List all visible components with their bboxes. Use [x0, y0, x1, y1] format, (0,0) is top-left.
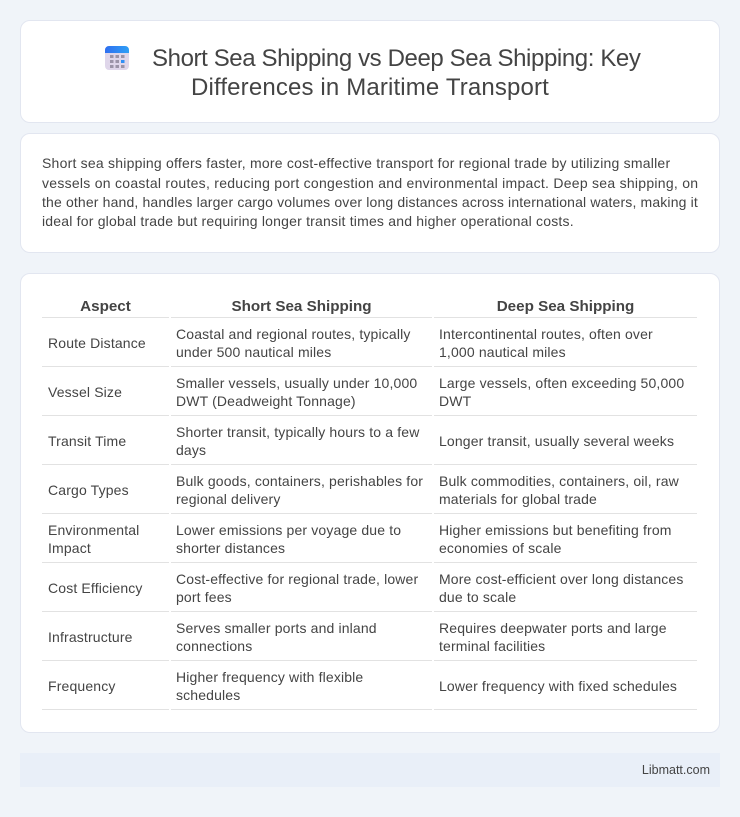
row: Infrastructure: Requires deepwater ports and large	[439, 620, 667, 636]
panel: header	[20, 20, 720, 123]
row: Environmental Impact	[48, 522, 672, 556]
row: Transit Time: Shorter transit, typically hours to a few	[176, 424, 419, 440]
title line 1: Short Sea Shipping vs Deep Sea Shipping: Key	[152, 45, 641, 72]
row: Transit Time: Longer transit, usually several weeks	[439, 433, 674, 449]
row: Infrastructure: Infrastructure	[48, 629, 133, 645]
row: Route Distance: 1,000 nautical miles	[439, 344, 566, 360]
row: Route Distance: under 500 nautical miles	[176, 344, 331, 360]
footer credit: Libmatt.com	[642, 763, 710, 777]
row: Transit Time: Transit Time	[48, 433, 126, 449]
row: Route Distance: Intercontinental routes, often over	[439, 326, 653, 342]
row: Vessel Size: Smaller vessels, usually under 10,000	[176, 375, 417, 391]
header: Deep Sea Shipping: Deep Sea Shipping	[497, 298, 634, 315]
header: Short Sea Shipping: Short Sea Shipping	[231, 298, 372, 315]
row: Infrastructure	[48, 620, 667, 654]
row: Transit Time	[48, 424, 674, 458]
header: Aspect: Aspect	[80, 298, 131, 315]
row: Frequency: Lower frequency with fixed schedules	[439, 678, 677, 694]
row: Infrastructure: connections	[176, 638, 252, 654]
row: Cargo Types: regional delivery	[176, 491, 280, 507]
row: Route Distance: Route Distance	[48, 335, 146, 351]
intro line 2: vessels on coastal routes, reducing port congestion and environmental impact. Deep sea shipping, on	[42, 175, 698, 191]
row: Transit Time: days	[176, 442, 206, 458]
row: Cargo Types: Bulk goods, containers, perishables for	[176, 473, 423, 489]
row: Route Distance	[48, 326, 653, 360]
row: Cost Efficiency: port fees	[176, 589, 232, 605]
panel: comparison table	[20, 273, 720, 733]
row: Cost Efficiency: Cost-effective for regional trade, lower	[176, 571, 418, 587]
row: Environmental Impact: Environmental	[48, 522, 139, 538]
row: Route Distance: Coastal and regional routes, typically	[176, 326, 410, 342]
row: Cargo Types: Cargo Types	[48, 482, 129, 498]
row: Vessel Size: DWT	[439, 393, 471, 409]
row: Infrastructure: terminal facilities	[439, 638, 545, 654]
row: Infrastructure: Serves smaller ports and inland	[176, 620, 377, 636]
title line 2: Differences in Maritime Transport	[191, 74, 549, 101]
row: Frequency: Higher frequency with flexible	[176, 669, 363, 685]
icon: calendar	[105, 46, 129, 70]
row: Frequency: schedules	[176, 687, 240, 703]
row: Environmental Impact: economies of scale	[439, 540, 562, 556]
row: Vessel Size	[48, 375, 684, 409]
intro line 4: ideal for global trade but requiring longer transit times and higher operational costs.	[42, 213, 574, 229]
row: Frequency	[48, 669, 677, 703]
panel: introduction	[20, 133, 720, 253]
footer	[20, 753, 720, 787]
row: Cargo Types: Bulk commodities, containers, oil, raw	[439, 473, 679, 489]
row: Cost Efficiency: Cost Efficiency	[48, 580, 143, 596]
row: Cargo Types	[48, 473, 679, 507]
row: Environmental Impact: shorter distances	[176, 540, 285, 556]
row: Frequency: Frequency	[48, 678, 116, 694]
row: Environmental Impact: Higher emissions but benefiting from	[439, 522, 672, 538]
intro line 3: the other hand, handles larger cargo volumes over long distances across international waters, making it	[42, 194, 698, 210]
row: Vessel Size: DWT (Deadweight Tonnage)	[176, 393, 356, 409]
intro line 1: Short sea shipping offers faster, more cost-effective transport for regional trade by utilizing smaller	[42, 155, 670, 171]
row: Environmental Impact: Lower emissions per voyage due to	[176, 522, 401, 538]
row: Environmental Impact: Impact	[48, 540, 91, 556]
row: Cost Efficiency: due to scale	[439, 589, 516, 605]
row: Vessel Size: Large vessels, often exceeding 50,000	[439, 375, 684, 391]
row: Vessel Size: Vessel Size	[48, 384, 122, 400]
row: Cost Efficiency	[48, 571, 684, 605]
row: Cost Efficiency: More cost-efficient over long distances	[439, 571, 684, 587]
header row	[80, 298, 634, 315]
row: Cargo Types: materials for global trade	[439, 491, 597, 507]
